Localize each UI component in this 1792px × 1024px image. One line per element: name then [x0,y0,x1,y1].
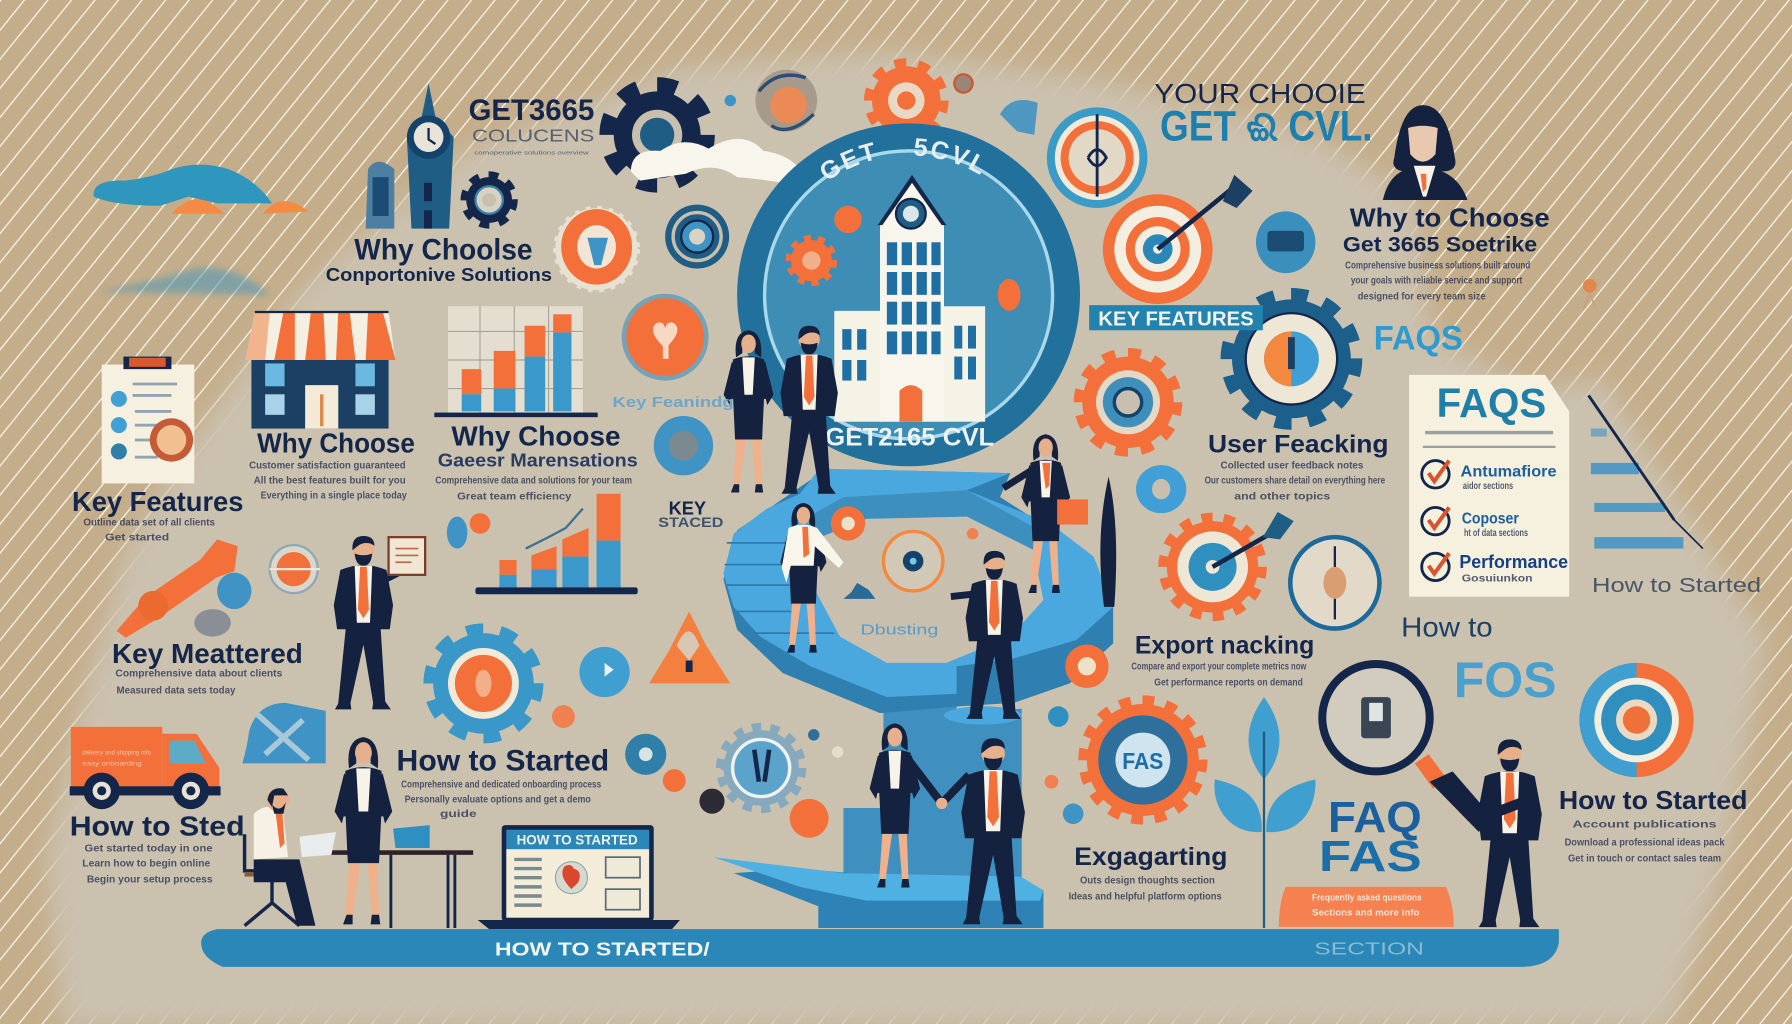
person: man holding certificate [334,536,425,709]
stair column [843,697,1022,880]
icon: FAS gear [1083,701,1202,819]
icon: clipboard [102,357,194,483]
icon: orange stair badge [831,506,978,541]
icon: target with arrow [1103,175,1253,304]
text: Key Features: Key Features [72,486,243,517]
text: User Feacking: Our customers share detail on everything here [1205,475,1386,486]
orange label box [1279,887,1454,927]
stray orange marker [1583,279,1597,309]
icon: laptop [478,825,680,929]
icon: small ship and label in clearing: Dbusting [861,622,938,638]
text: How to: How to [1401,612,1493,643]
people shaking hands [870,723,1025,924]
panel: FAQS document: FAQS [1437,380,1546,426]
text: How to Sted: How to Sted [70,810,245,841]
spiral ring body [723,470,1113,713]
icon: store [246,311,395,429]
icon: woman portrait [1383,105,1467,200]
text: Why Choose under chart: Why Choose [451,421,621,452]
icon: small orange circle [1065,645,1109,688]
text: Key Features: Get started [105,533,169,544]
text: Why Choose under chart: Gaeesr Marensations [438,449,638,470]
standing woman [335,737,392,924]
text: Key Features [72,486,243,544]
icon: top globe [755,70,817,131]
icon: clock ring [1047,107,1147,208]
bar chart [434,306,598,417]
text: FAQ FAS [1319,794,1422,881]
label: FAQS: FAQS [1374,320,1463,358]
text: Key Meattered: Comprehensive data about clients [115,669,282,680]
text: Why Choose under store: All the best features built for you [254,475,406,486]
text: Export nacking: Get performance reports on demand [1154,678,1303,689]
text: Exgagarting: Ideas and helpful platform options [1069,891,1222,902]
text: KEY STACED: STACED [658,515,724,530]
text: KEY STACED: KEY [669,497,706,518]
label: faded key features: Key Feanindg [613,395,734,411]
checklist item 3 [1422,551,1568,585]
icon: orange heart badge [622,294,709,381]
icon: delivery truck: easy onboarding [82,761,142,768]
lower platform [713,857,1043,928]
icon: ring dial [1290,537,1379,629]
people on stairs [780,434,1116,719]
icon: blue donut [1136,465,1186,513]
spiral ring top [723,469,1113,697]
bottom blue banner [201,929,1559,967]
circular title: GET 5CVL [821,138,982,178]
icon: navy gear with cloud [607,85,810,189]
text: KEY STACED [658,497,724,530]
top inner shadow [815,490,1033,550]
text: How to Started center: Personally evaluate options and get a demo [405,794,591,805]
text: How to Sted: Begin your setup process [87,874,213,885]
central spiral staircase [713,469,1113,928]
icon: gear target with arrow [1163,512,1294,616]
heading: GET3665 COLUCENS: GET3665 [469,94,594,127]
small icons near top [725,74,1038,135]
text: Why to Choose: Get 3665 Soetrike [1343,231,1537,256]
office desk with people [245,737,473,928]
text: Why Choose under store: Everything in a single place today [261,490,407,501]
checklist item 3: Gosuiunkon [1462,574,1533,585]
icon: clock tower [366,83,454,229]
text: Export nacking: Compare and export your complete metrics now [1131,662,1307,673]
emblem bottom label: GET2165 CVL [825,424,994,452]
heading: YOUR CHOOIE GET CVL: YOUR CHOOIE [1154,78,1366,109]
icon: large blue gear [1227,295,1355,423]
text: Why Choose under store: Customer satisfaction guaranteed [249,461,406,472]
building [834,175,985,422]
bottom blue banner: SECTION [1314,938,1424,958]
text: User Feacking: and other topics [1234,491,1330,502]
people beside the emblem [724,326,838,494]
heading: GET3665 COLUCENS: COLUCENS [472,126,594,146]
icon: spiral inner gear [883,531,943,591]
icon: blue circle [654,416,713,475]
text: Why Choose under chart: Great team efficiency [457,491,572,502]
heading: Why Choolse [326,233,552,285]
text: Why Choose under store: Why Choose [257,428,415,459]
icon: orange gear [1079,353,1177,451]
icon: pale blue gear [720,727,802,809]
checklist item 1: Antumafiore [1461,464,1557,481]
text: Why to Choose [1343,202,1550,302]
text: FOS large: FOS [1454,651,1557,708]
chart: rising bars [447,494,638,594]
text: FAQ FAS: FAS [1319,833,1422,881]
text: Why to Choose: your goals with reliable service and support [1351,275,1523,286]
heading: YOUR CHOOIE GET CVL: GET ଈ CVL. [1160,103,1373,150]
icon: small globe and blue blob [194,545,320,637]
text: Export nacking: Export nacking [1135,632,1314,660]
text: How to Sted [70,810,245,885]
text: How to Started center [397,744,609,820]
text: Why to Choose: designed for every team size [1358,291,1486,302]
text: How to Started right: Download a professional ideas pack [1565,838,1725,849]
orange label box: Sections and more info [1312,907,1420,917]
panel: FAQS document [1409,375,1569,597]
seated man [245,788,336,926]
text: How to Sted: Learn how to begin online [82,858,211,869]
icon: laptop: HOW TO STARTED [517,833,638,848]
orange label box: Frequently asked questions [1312,893,1422,903]
text: User Feacking: User Feacking [1208,431,1389,459]
text: Why to Choose: Comprehensive business solutions built around [1345,261,1530,272]
checklist item 2: ht of data sections [1464,528,1528,539]
text: User Feacking: Collected user feedback notes [1221,461,1363,472]
icon: delivery truck [70,727,221,809]
icon: small navy gear [464,175,514,225]
checklist item 1 [1422,461,1557,492]
icon: triangular stepped chart [1589,395,1703,549]
text: Key Meattered: Key Meattered [112,638,303,669]
text: How to Started center: How to Started [397,744,609,777]
checklist item 3: Performance [1459,551,1568,572]
icon: blue circle and orange triangle [579,611,730,697]
text: Why Choose under store [249,428,415,501]
text: Why Choose under chart: Comprehensive data and solutions for your team [435,475,632,486]
text: Key Features: Outline data set of all clients [83,518,215,529]
text: Why to Choose: Why to Choose [1350,202,1550,232]
text: How to Started faded: How to Started [1592,574,1761,597]
icon: plant [1214,697,1315,928]
text: FAQ FAS: FAQ [1328,794,1422,842]
text: How to Started right: Account publications [1573,819,1717,830]
text: Exgagarting [1069,843,1227,902]
small icons near spiral [552,705,843,838]
icon: blue gear [430,630,537,737]
banner: KEY FEATURES: KEY FEATURES [1098,308,1254,331]
checklist item 2: Coposer [1462,510,1519,527]
icon: concentric donut [1579,663,1694,777]
small blue and orange dots by the stairs [1045,706,1083,824]
text: Exgagarting: Outs design thoughts section [1080,875,1215,886]
text: Key Meattered [112,638,303,697]
text: Exgagarting: Exgagarting [1074,843,1227,871]
icon: top orange gear [869,63,944,138]
text: Why Choose under chart [435,421,638,502]
orange emblem badges [789,206,1021,311]
heading: GET3665 COLUCENS: comoperative solutions overview [474,150,590,156]
icon: magnifying glass with person [1322,664,1542,927]
text: How to Started center: Comprehensive and dedicated onboarding process [401,779,601,790]
icon: blue ring gear [665,205,729,269]
checklist item 2 [1422,507,1528,539]
text: How to Started center: guide [440,809,477,820]
icon: orange frilled badge [555,208,638,290]
text: How to Started right [1559,785,1747,865]
text: How to Sted: Get started today in one [85,843,213,854]
text: User Feacking [1205,431,1389,502]
central emblem: blue circle with building [737,123,1080,466]
inner clearing [815,517,1043,663]
icon: blue hills top left [94,165,309,295]
icon: FAS gear: FAS [1122,748,1163,774]
icon: delivery truck: delivery and shipping info [82,749,151,756]
text: Export nacking [1131,632,1314,689]
text: How to Started right: How to Started [1559,785,1747,815]
heading: Why Choolse: Conportonive Solutions [326,264,552,285]
icon: blue speech bubble [242,703,326,763]
bottom blue banner: HOW TO STARTED/ [495,938,710,959]
icon: orange wrench [117,539,238,638]
heading: GET3665 COLUCENS [469,94,594,156]
text: Key Meattered: Measured data sets today [117,686,236,697]
heading: Why Choolse: Why Choolse [354,233,533,266]
desk [314,825,473,928]
stair steps [725,543,834,633]
heading: YOUR CHOOIE GET CVL [1154,78,1373,150]
checklist item 1: aidor sections [1463,481,1513,492]
icon: small ship and label in clearing [843,583,938,638]
text: How to Started right: Get in touch or contact sales team [1568,854,1721,865]
icon: small blue dial [1256,211,1315,273]
